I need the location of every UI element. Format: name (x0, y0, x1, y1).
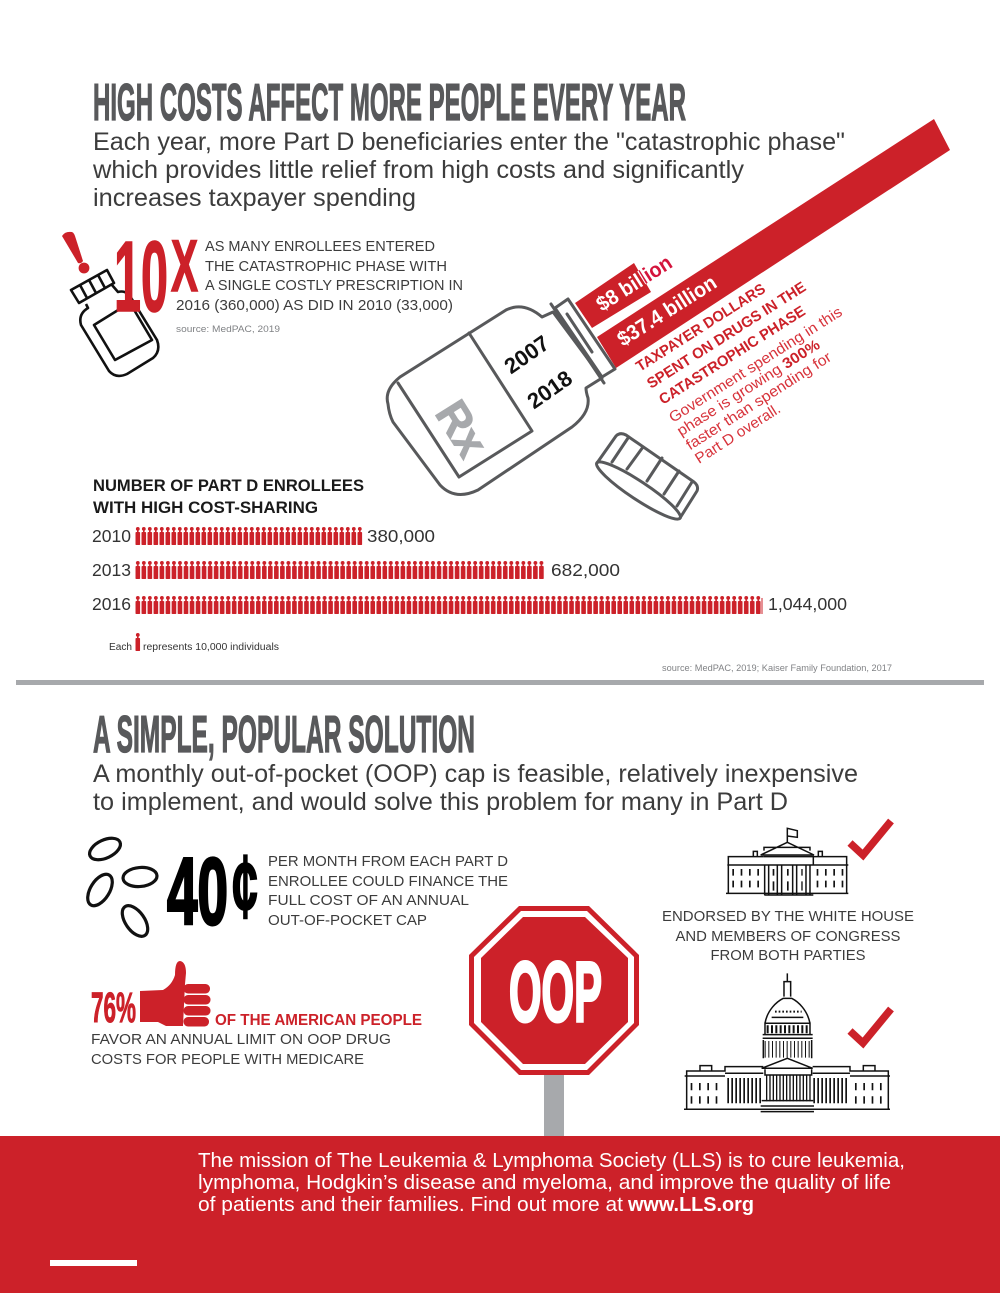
row: 2010 (92, 526, 435, 546)
bar: 2018 $37.4 billion (597, 119, 950, 368)
icon: small bottle (71, 270, 158, 376)
text: American people statistic: COSTS FOR PEOPLE WITH MEDICARE (91, 1051, 364, 1068)
text: American people statistic: FAVOR AN ANNUAL LIMIT ON OOP DRUG (91, 1031, 391, 1048)
text: 10X explanation: 2016 (360,000) AS DID IN 2010 (33,000) (176, 297, 453, 314)
text: endorsed by White House (662, 908, 914, 964)
row: 2013: 2013 (92, 560, 131, 580)
text: 10X explanation (176, 238, 463, 314)
row: 2010: 380,000 (367, 526, 435, 546)
legend: each icon represents 10,000 individuals (109, 633, 279, 653)
text: mission statement: of patients and their families. Find out more at (198, 1194, 623, 1216)
text: 40 cents explanation: OUT-OF-POCKET CAP (268, 912, 427, 929)
big stat: 10X: 10 (114, 221, 168, 333)
intro text: monthly OOP cap: to implement, and would solve this problem for many in Part D (93, 788, 788, 816)
row: 2010: 2010 (92, 526, 131, 546)
icon: open Rx bottle: 2018 (522, 365, 577, 414)
bar: 2018 $37.4 billion: $37.4 billion (613, 271, 721, 351)
bar: 2007 $8 billion (575, 258, 673, 328)
icon: open Rx bottle: 2007 (499, 330, 554, 379)
intro text: catastrophic phase: which provides little relief from high costs and significantly (92, 156, 744, 184)
footer band: mission statement (0, 1136, 1000, 1293)
text: mission statement (198, 1150, 905, 1216)
text: 10X explanation: A SINGLE COSTLY PRESCRIPTION IN (205, 277, 463, 294)
icon: red check (850, 821, 891, 855)
chart heading: enrollees with high cost-sharing (93, 477, 364, 517)
big stat: 40 cents: 40 (167, 839, 228, 945)
text: 40 cents explanation: FULL COST OF AN ANNUAL (268, 892, 469, 909)
big stat: 76%: 76% (91, 984, 136, 1032)
text: 40 cents explanation (268, 853, 508, 929)
icon: OOP stop sign (469, 906, 639, 1137)
chart heading: enrollees with high cost-sharing: WITH HIGH COST-SHARING (93, 499, 318, 517)
bar: 2007 $8 billion: $8 billion (592, 251, 676, 316)
text: mission statement: lymphoma, Hodgkin’s disease and myeloma, and improve the quality of life (198, 1172, 891, 1194)
bar: 2007 $8 billion: $8 billion (592, 251, 676, 316)
text: taxpayer dollars caption: CATASTROPHIC PHASE (656, 303, 809, 408)
legend: each icon represents 10,000 individuals: represents 10,000 individuals (143, 642, 279, 653)
icon: White House (726, 828, 848, 895)
text: taxpayer dollars caption: SPENT ON DRUGS IN THE (644, 279, 809, 392)
big stat: 40 cents: ¢ (232, 837, 258, 937)
text: government spending note: Government spending in this (666, 304, 846, 426)
intro text: monthly OOP cap: A monthly out-of-pocket (OOP) cap is feasible, relatively inexpensive (93, 760, 858, 788)
text: 40 cents explanation: ENROLLEE COULD FINANCE THE (268, 873, 508, 890)
icon: Capitol building (684, 973, 890, 1112)
text: government spending note (666, 304, 846, 467)
intro text: catastrophic phase: Each year, more Part D beneficiaries enter the "catastrophic phase" (93, 128, 845, 156)
icon: White House with check (726, 821, 891, 895)
text: 10X explanation: AS MANY ENROLLEES ENTERED (205, 238, 435, 255)
legend: each icon represents 10,000 individuals: Each (109, 642, 132, 653)
icon: OOP stop sign: OOP (509, 945, 602, 1040)
text: government spending note: phase is growing 300% (674, 336, 823, 440)
chart: taxpayer dollars pouring from bottle (387, 119, 950, 526)
text: American people statistic (91, 1012, 422, 1068)
text: 40 cents explanation: PER MONTH FROM EACH PART D (268, 853, 508, 870)
icon: Capitol with check (684, 973, 891, 1112)
text: mission statement: www.LLS.org (627, 1194, 754, 1216)
icon: exclamation mark (62, 232, 89, 273)
text: taxpayer dollars caption: TAXPAYER DOLLARS (633, 280, 769, 375)
row: 2016: 1,044,000 (768, 594, 847, 614)
text: endorsed by White House: FROM BOTH PARTIES (710, 947, 866, 964)
icon: bottle cap (592, 434, 698, 526)
chart heading: enrollees with high cost-sharing: NUMBER OF PART D ENROLLEES (93, 477, 364, 495)
text: American people statistic: OF THE AMERICAN PEOPLE (215, 1012, 422, 1029)
pictogram chart: enrollees by year (92, 526, 847, 614)
text: A SIMPLE, POPULAR SOLUTION (93, 706, 475, 764)
row: 2013: 682,000 (551, 560, 620, 580)
text: endorsed by White House: AND MEMBERS OF CONGRESS (676, 928, 900, 945)
icon: open Rx bottle (387, 299, 615, 494)
icon: red check (850, 1009, 891, 1043)
row: 2016 (92, 594, 847, 614)
icon: coins (83, 834, 158, 941)
icon: thumbs up (140, 961, 210, 1026)
intro text: catastrophic phase: increases taxpayer spending (93, 184, 416, 212)
text: endorsed by White House: ENDORSED BY THE WHITE HOUSE (662, 908, 914, 925)
big stat: 10X: X (171, 226, 198, 307)
intro text: monthly OOP cap (93, 760, 858, 816)
text: government spending note: faster than spending for (683, 349, 835, 454)
row: 2016: 2016 (92, 594, 131, 614)
intro text: catastrophic phase (92, 128, 845, 212)
source note: MedPAC and Kaiser: source: MedPAC, 2019; Kaiser Family Foundation, 2017 (662, 663, 892, 674)
text: government spending note: Part D overall. (692, 400, 784, 467)
row: 2013 (92, 560, 620, 580)
text: 10X explanation: THE CATASTROPHIC PHASE WITH (205, 258, 447, 275)
source note: MedPAC 2019: source: MedPAC, 2019 (176, 324, 280, 335)
icon: open Rx bottle: Rx (426, 391, 498, 466)
icon: pill bottle with exclamation mark (62, 232, 158, 376)
text: mission statement: The mission of The Leukemia & Lymphoma Society (LLS) is to cure leukemia, (198, 1150, 905, 1172)
